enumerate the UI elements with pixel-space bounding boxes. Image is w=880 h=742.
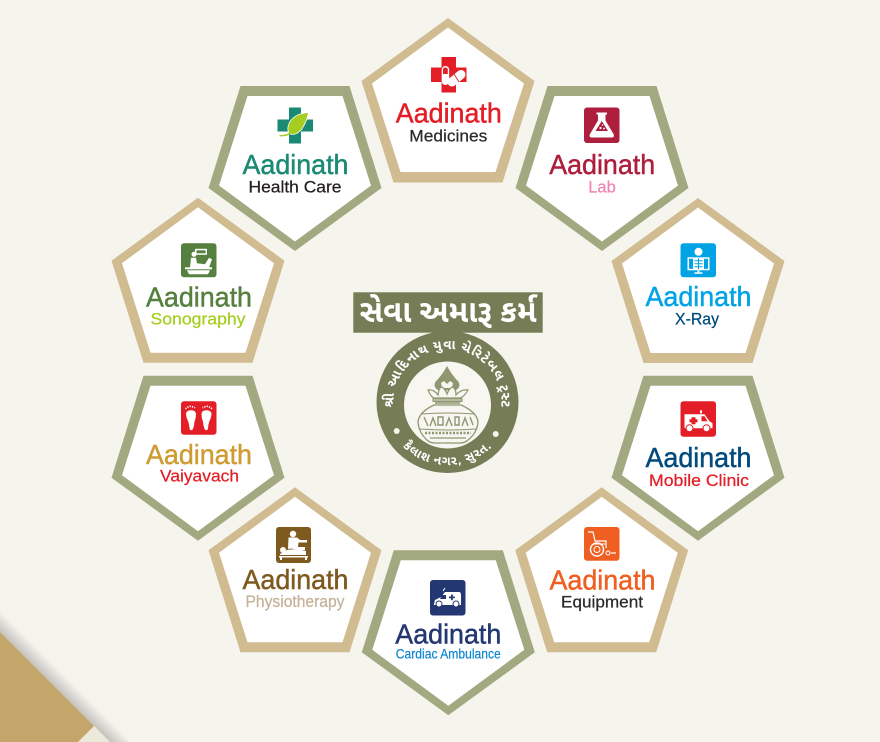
seal circle	[376, 330, 518, 473]
icon: cross with leaf	[278, 108, 313, 144]
title: Aadinath	[242, 149, 348, 180]
ring text bottom: કૈલાશ નગર, સુરત.	[403, 439, 491, 466]
panel: Vaiyavach	[112, 376, 284, 541]
corner decoration	[0, 610, 132, 742]
pentagon frame	[515, 487, 688, 652]
pentagon frame	[112, 198, 284, 363]
pentagon frame	[362, 18, 534, 182]
icon: kalash pot	[418, 367, 478, 443]
pentagon frame	[208, 487, 382, 652]
title: Aadinath	[550, 564, 656, 595]
pentagon frame	[516, 86, 688, 251]
icon: lab flask	[584, 108, 620, 143]
title: Aadinath	[646, 281, 752, 312]
icon: mobile clinic van	[680, 401, 716, 437]
panel: Equipment	[515, 487, 688, 652]
title: Aadinath	[146, 439, 252, 470]
title: Aadinath	[395, 618, 501, 649]
banner: સેવા અમારૂ કર્મ	[360, 293, 539, 335]
title: Aadinath	[396, 98, 502, 129]
panel: Mobile Clinic	[612, 376, 784, 541]
dots	[394, 428, 499, 437]
panel: Sonography	[112, 198, 284, 363]
subtitle: Vaiyavach	[160, 468, 239, 486]
panel: Cardiac Ambulance	[362, 550, 535, 715]
pentagon frame	[612, 198, 784, 363]
subtitle: Equipment	[561, 594, 643, 612]
icon: physiotherapy	[276, 527, 311, 563]
title: Aadinath	[146, 282, 252, 313]
subtitle: Mobile Clinic	[649, 472, 749, 490]
icon: medical cross with pills	[431, 57, 466, 92]
icon: footprints	[181, 401, 216, 435]
title: Aadinath	[242, 564, 348, 595]
pentagon frame	[208, 86, 382, 251]
ring text top: શ્રી આદિનાથ યુવા ચેરિટેબલ ટ્રસ્ટ	[382, 340, 510, 408]
pentagon frame	[362, 550, 535, 715]
title: Aadinath	[646, 442, 752, 473]
icon: ambulance	[430, 580, 466, 616]
panel: Physiotherapy	[208, 487, 382, 652]
pentagon frame	[112, 376, 284, 541]
center emblem	[353, 292, 543, 473]
panel: Health Care	[208, 86, 382, 251]
icon: sonography bed	[181, 243, 216, 277]
subtitle: Health Care	[248, 179, 342, 197]
panel: Lab	[516, 86, 688, 251]
icon: x-ray screen	[680, 243, 716, 277]
panel: Medicines	[362, 18, 534, 182]
subtitle: Lab	[588, 179, 616, 197]
pentagon frame	[612, 376, 784, 541]
subtitle: Physiotherapy	[246, 593, 345, 611]
subtitle: Sonography	[150, 310, 246, 328]
icon: wheelchair	[584, 527, 620, 561]
subtitle: X-Ray	[675, 310, 720, 328]
subtitle: Cardiac Ambulance	[396, 645, 501, 661]
title: Aadinath	[549, 149, 655, 180]
subtitle: Medicines	[409, 127, 487, 145]
panel: X-Ray	[612, 198, 784, 363]
